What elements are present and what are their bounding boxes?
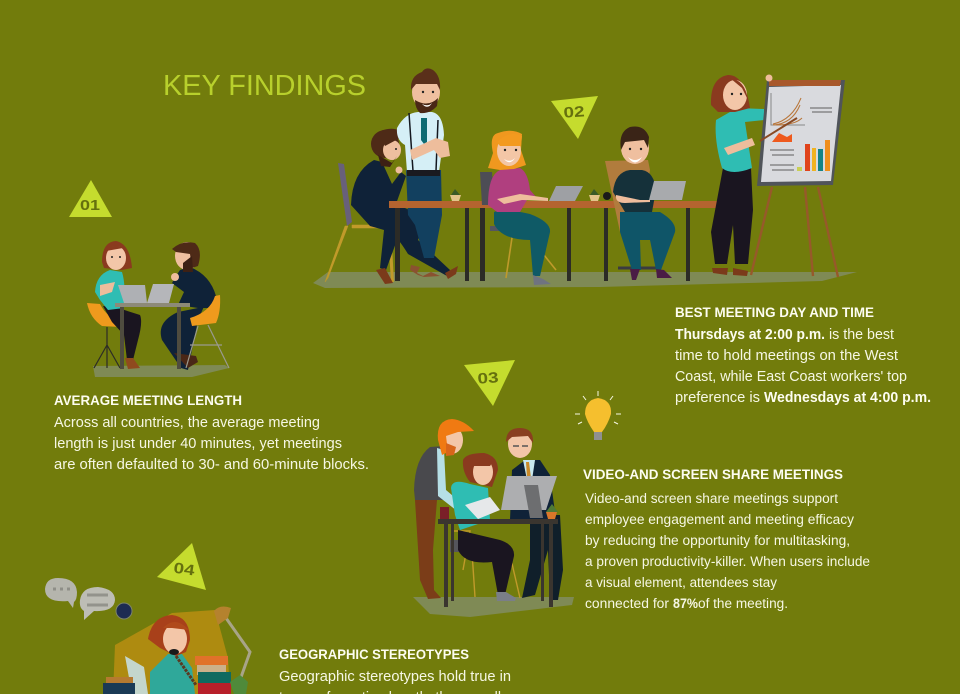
text: video and screen share meetings: of the meeting. (698, 596, 788, 611)
monitor (501, 476, 557, 510)
plant (230, 675, 248, 694)
text: best meeting day and time: Wednesdays at 4:00 p.m. (764, 390, 931, 406)
badge 04: 04 (172, 560, 196, 579)
text: video and screen share meetings: connected for (585, 596, 670, 611)
text: average meeting length: length is just under 40 minutes, yet meetings (54, 436, 342, 452)
woman (150, 654, 195, 694)
text: video and screen share meetings: a visual element, attendees stay (585, 575, 777, 590)
badge 04 (157, 543, 206, 590)
text: best meeting day and time: time to hold meetings on the West (675, 348, 898, 364)
seated woman with laptop (480, 131, 583, 285)
text: video and screen share meetings: by reducing the opportunity for multitasking, (585, 533, 850, 548)
text: video and screen share meetings: 87% (673, 596, 698, 611)
icon: speech bubbles and globe (45, 578, 132, 620)
illustration: team meeting at long table (313, 68, 857, 288)
seated woman on phone (450, 453, 520, 601)
text: average meeting length: AVERAGE MEETING LENGTH (54, 392, 242, 408)
badge 03 (464, 360, 515, 406)
table with laptops (115, 303, 190, 307)
text: video and screen share meetings: Video-and screen share meetings support (585, 491, 838, 506)
text: best meeting day and time (675, 304, 931, 406)
right orange chair (190, 295, 220, 326)
text: geographic stereotypes (279, 646, 511, 694)
table top (389, 201, 717, 208)
text: video and screen share meetings: VIDEO-AND SCREEN SHARE MEETINGS (583, 466, 843, 482)
badge 02: 02 (563, 103, 585, 122)
table plants (450, 195, 600, 201)
text: video and screen share meetings: employee engagement and meeting efficacy (585, 512, 854, 527)
man with glasses (506, 428, 563, 600)
title: key findings: KEY FINDINGS (163, 70, 366, 102)
text: best meeting day and time: is the best (829, 327, 894, 343)
flip chart easel (751, 74, 845, 277)
laptop (549, 186, 583, 201)
books right (195, 656, 228, 665)
standing man with suspenders (397, 68, 450, 277)
text: geographic stereotypes: Geographic stereotypes hold true in (279, 669, 511, 685)
presenter woman (711, 75, 764, 276)
seated woman (95, 241, 141, 369)
books left (106, 677, 133, 685)
text: best meeting day and time: Thursdays at 2:00 p.m. (675, 327, 825, 343)
text: geographic stereotypes: GEOGRAPHIC STEREOTYPES (279, 646, 469, 662)
icon: light bulb (575, 391, 621, 440)
left orange chair (87, 303, 122, 327)
text: video and screen share meetings: a proven productivity-killer. When users include (585, 554, 870, 569)
text: average meeting length: are often defaulted to 30- and 60-minute blocks. (54, 457, 369, 473)
plant and cup (546, 512, 557, 519)
text: video and screen share meetings (583, 466, 870, 611)
desk lamp (226, 618, 250, 680)
badge 01 (69, 180, 112, 217)
seated man with laptop (605, 126, 686, 280)
text: best meeting day and time: Coast, while East Coast workers' top (675, 369, 907, 385)
illustration: office desk with three people (413, 419, 574, 617)
badge 02 (551, 96, 598, 139)
illustration: two people at small table (87, 241, 229, 377)
text: best meeting day and time: BEST MEETING DAY AND TIME (675, 304, 874, 320)
chart lines (771, 93, 805, 125)
bar chart (797, 167, 802, 171)
text: average meeting length: Across all countries, the average meeting (54, 415, 320, 431)
desk (438, 519, 558, 524)
text: average meeting length (54, 392, 369, 473)
badge 03: 03 (477, 369, 499, 388)
seated man (161, 242, 216, 370)
shoes (376, 266, 458, 284)
illustration: woman on phone at lit desk (103, 607, 250, 694)
orange area chart (772, 133, 792, 142)
standing orange-haired man (414, 419, 474, 599)
table legs (395, 208, 690, 281)
floor shadow (313, 272, 857, 288)
lamp light cone (113, 610, 230, 694)
seated bearded man (325, 129, 458, 284)
text: best meeting day and time: preference is (675, 390, 760, 406)
badge 01: 01 (80, 197, 100, 214)
paper (125, 656, 148, 694)
